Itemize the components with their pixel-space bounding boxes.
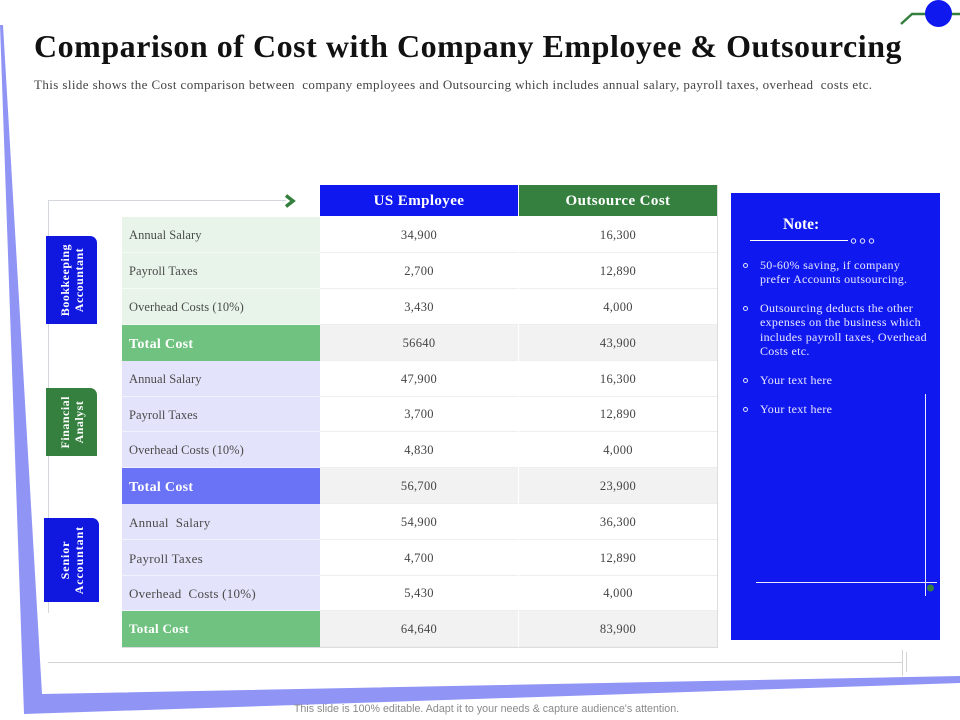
note text 2: includes payroll taxes, Overhead bbox=[760, 330, 927, 344]
tag: Senior Accountant: Senior bbox=[58, 541, 72, 579]
bracket lines with arrow bbox=[48, 194, 296, 613]
note panel crosshair corner with green dot bbox=[756, 394, 937, 596]
note text 4: Your text here bbox=[760, 402, 832, 416]
note text 3: Your text here bbox=[760, 373, 832, 387]
text: Total Cost bbox=[129, 336, 193, 352]
text: 47,900 bbox=[401, 372, 437, 386]
text: 5,430 bbox=[404, 586, 434, 600]
text: 4,000 bbox=[603, 586, 633, 600]
note heading rule with circles bbox=[750, 238, 874, 244]
text: 83,900 bbox=[600, 622, 636, 636]
text: 2,700 bbox=[404, 264, 434, 278]
values: Outsource Cost bbox=[519, 217, 717, 253]
tag: Senior Accountant bbox=[44, 518, 99, 602]
note bullet 4 bbox=[743, 407, 748, 412]
text: 23,900 bbox=[600, 478, 636, 492]
tag: Senior Accountant: Accountant bbox=[72, 526, 86, 594]
note bullet 1 bbox=[743, 263, 748, 268]
text: 36,300 bbox=[600, 514, 636, 528]
note bullet 2 bbox=[743, 306, 748, 311]
text: Overhead Costs (10%) bbox=[129, 586, 256, 601]
text: Annual Salary bbox=[129, 514, 210, 530]
note text 1: prefer Accounts outsourcing. bbox=[760, 272, 907, 286]
header: US Employee: US Employee bbox=[374, 193, 464, 209]
text: 54,900 bbox=[401, 514, 437, 528]
note text 2: Costs etc. bbox=[760, 344, 810, 358]
text: 12,890 bbox=[600, 407, 636, 421]
text: 3,430 bbox=[404, 300, 434, 314]
values: US Employee: 34,900 bbox=[401, 228, 437, 242]
bottom rule with end ticks bbox=[48, 650, 907, 676]
footer note: This slide is 100% editable. Adapt it to your needs & capture audience's attention. bbox=[294, 703, 679, 715]
note bullet 3 bbox=[743, 378, 748, 383]
text: 4,000 bbox=[603, 442, 633, 456]
note text 1: 50-60% saving, if company bbox=[760, 258, 900, 272]
text: Total Cost bbox=[129, 621, 189, 636]
subtitle: This slide shows the Cost comparison between company employees and Outsourcing which includes annual salary, payroll taxes, overhead costs etc. bbox=[34, 77, 872, 92]
note panel bbox=[731, 193, 940, 640]
note text 2 bbox=[760, 301, 927, 358]
tag: Financial Analyst: Financial bbox=[58, 396, 72, 448]
text: Payroll Taxes bbox=[129, 264, 198, 278]
text: 4,000 bbox=[603, 300, 633, 314]
tag: Bookkeeping Accountant bbox=[46, 236, 97, 324]
tag: Financial Analyst: Analyst bbox=[72, 401, 86, 443]
text: Total Cost bbox=[129, 480, 193, 494]
values: Outsource Cost: 16,300 bbox=[600, 228, 636, 242]
note text 1 bbox=[760, 258, 907, 286]
note text 2: Outsourcing deducts the other bbox=[760, 301, 913, 315]
text: 3,700 bbox=[404, 407, 434, 421]
text: Overhead Costs (10%) bbox=[129, 443, 244, 457]
header: Outsource Cost bbox=[519, 185, 717, 216]
title: Comparison of Cost with Company Employee & Outsourcing bbox=[34, 28, 902, 64]
tag: Financial Analyst bbox=[46, 388, 97, 456]
text: Overhead Costs (10%) bbox=[129, 300, 244, 314]
text: 12,890 bbox=[600, 264, 636, 278]
text: Payroll Taxes bbox=[129, 408, 198, 422]
note heading: Note: bbox=[783, 216, 819, 233]
tag: Bookkeeping Accountant: Bookkeeping bbox=[58, 244, 72, 316]
text: 64,640 bbox=[401, 622, 437, 636]
decorative top-right connector with circle icon bbox=[900, 0, 960, 27]
text: 4,700 bbox=[404, 550, 434, 564]
text: Payroll Taxes bbox=[129, 550, 203, 566]
values: US Employee bbox=[320, 217, 518, 253]
header: Outsource Cost: Outsource Cost bbox=[566, 193, 670, 209]
text: Annual Salary bbox=[129, 372, 202, 386]
tag: Bookkeeping Accountant: Accountant bbox=[72, 248, 86, 312]
text: 16,300 bbox=[600, 372, 636, 386]
row labels bbox=[122, 217, 320, 253]
text: 43,900 bbox=[600, 336, 636, 350]
row labels: Annual Salary bbox=[129, 228, 202, 242]
note text 2: expenses on the business which bbox=[760, 315, 921, 329]
text: 56,700 bbox=[401, 478, 437, 492]
table bbox=[122, 185, 718, 648]
text: 12,890 bbox=[600, 550, 636, 564]
header: US Employee bbox=[320, 185, 518, 216]
text: 4,830 bbox=[404, 442, 434, 456]
text: 56640 bbox=[403, 336, 435, 350]
